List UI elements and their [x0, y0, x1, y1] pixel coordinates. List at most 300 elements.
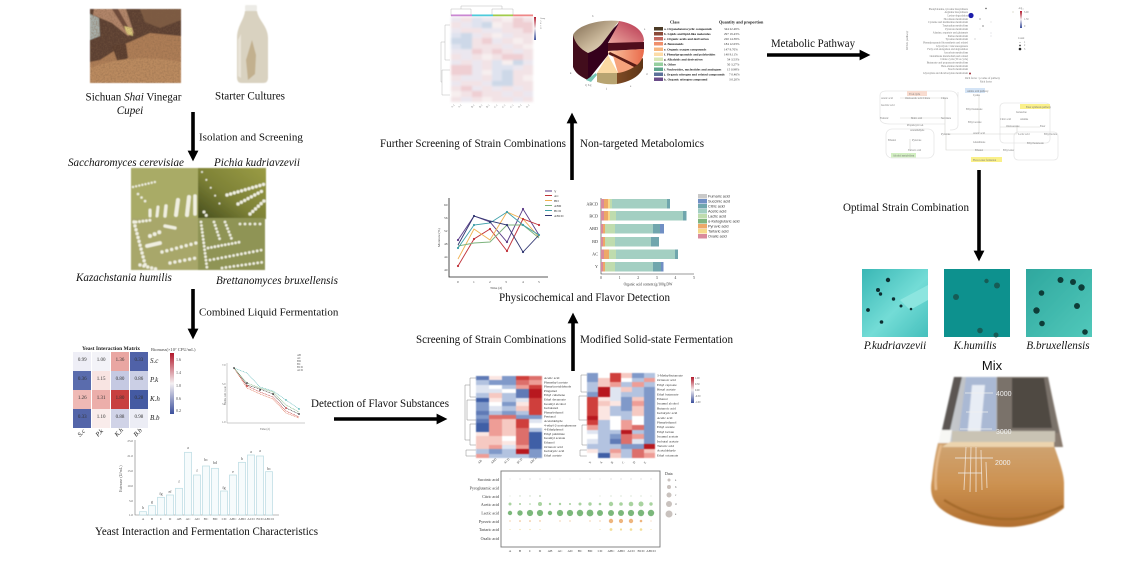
heatmap dendrograms and labels: organic compounds: Acetic acid	[657, 416, 673, 420]
chart: organic acid bubble matrix: a	[675, 479, 677, 482]
legend: metabolite classes and proportions: 297 19.43%	[724, 32, 740, 36]
chart: KEGG enrichment bubble plot: Glycolysis / Gluconeogenesis	[936, 45, 968, 48]
chart: organic acid bubble matrix: ACD	[627, 549, 635, 553]
chart: yeast interaction matrix labels and colourbar: S.c	[150, 357, 159, 365]
pie: orange sector	[608, 49, 644, 65]
diagram: metabolic pathway map: Glutathione	[973, 141, 986, 144]
chart: organic acid bubble matrix: C	[529, 549, 532, 553]
chart: enzyme activity bar chart	[118, 439, 279, 521]
legend: metabolite classes and proportions: 147 9.70%	[724, 48, 738, 52]
heatmap: flavor volatiles across strain combinations	[475, 375, 543, 459]
heatmap dendrograms and labels: organic compounds: Ethyl acetate	[657, 425, 675, 429]
diagram: metabolic pathway map: TCA cycle	[909, 93, 921, 96]
chart: enzyme activity bar chart: A	[142, 517, 145, 521]
heatmap dendrograms and labels: organic compounds: Ethanol	[657, 397, 668, 401]
chart: organic acid bubble matrix: ABC	[608, 549, 615, 553]
chart: organic acid bubble matrix: Tartaric acid	[479, 527, 499, 532]
chart: organic acid bubble matrix: BD	[588, 549, 593, 553]
chart: moisture line chart: 1	[473, 280, 475, 284]
chart: organic acid bubble matrix: BCD	[638, 549, 645, 553]
heatmap dendrograms and labels: organic compounds: Hexyl acetate	[657, 388, 676, 392]
chart: KEGG enrichment bubble plot	[905, 7, 1029, 84]
heatmap: organic compounds across strains	[586, 372, 656, 459]
chart: organic acid stacked bars: 1	[619, 276, 621, 280]
chart: yeast interaction matrix labels and colourbar: 1.4	[176, 370, 181, 375]
chart: organic acid bubble matrix: CD	[598, 549, 603, 553]
chart: moisture line chart: ABCD	[554, 214, 564, 218]
label: Screening of Strain Combinations: Screening of Strain Combinations	[416, 334, 566, 346]
chart: enzyme activity bar chart: ABCD	[264, 517, 274, 521]
chart: organic acid stacked bars: 4	[675, 276, 677, 280]
label: Combined Liquid Fermentation: Combined Liquid Fermentation	[199, 306, 339, 318]
heatmap dendrograms and labels: organic compounds: Ethyl lactate	[657, 430, 675, 434]
heatmap dendrograms and labels: organic compounds: 0.00	[695, 389, 700, 392]
chart: enzyme activity bar chart: BC	[204, 517, 209, 521]
chart: moisture line chart: 40	[444, 268, 448, 272]
chart: organic acid stacked bars: 5	[693, 276, 695, 280]
chart: KEGG enrichment bubble plot: Rich factor / p-value of pathway	[965, 77, 1001, 80]
legend: metabolite classes and proportions	[654, 20, 764, 82]
legend: metabolite classes and proportions: 140 9.11%	[724, 52, 738, 56]
chart: enzyme activity bar chart: a	[187, 445, 189, 450]
chart: KEGG enrichment bubble plot: Count	[1018, 37, 1025, 40]
arrow: optimal strain combination	[977, 170, 981, 256]
photo: Sichuan Shai vinegar cupei	[90, 9, 181, 83]
label: Brettanomyces bruxellensis: Brettanomyces bruxellensis	[216, 275, 338, 287]
legend: metabolite classes and proportions: 184 12.03%	[724, 42, 740, 46]
heatmap dendrograms and labels: organic compounds: D	[632, 460, 637, 465]
heatmap: yeast interaction matrix cells: 0.80	[116, 377, 124, 382]
label: Kazachstania humilis: Kazachstania humilis	[75, 272, 172, 284]
photo: four yeast colony plates	[131, 168, 266, 270]
chart: viable cell count line chart	[222, 354, 305, 431]
heatmap dendrograms and labels: flavor volatiles: Ethyl cubebene	[544, 393, 565, 397]
chart: organic acid stacked bars: 3	[656, 276, 658, 280]
chart: organic acid bubble matrix: Acetic acid	[481, 502, 499, 507]
diagram: metabolic pathway map: Lysine	[973, 94, 981, 97]
label: P.kudriavzevii: P.kudriavzevii	[863, 340, 926, 352]
arrow: isolation and screening	[191, 112, 195, 156]
legend: metabolite classes and proportions: d. Benzenoids	[664, 42, 684, 46]
chart: KEGG enrichment bubble plot: Citrate cycle (TCA cycle)	[940, 58, 968, 61]
diagram: metabolic pathway map: Ethanol	[975, 149, 983, 152]
chart: enzyme activity bar chart: AB	[177, 517, 182, 521]
heatmap: yeast interaction matrix cells: 1.15	[97, 377, 105, 382]
heatmap dendrograms and labels: organic compounds: Isobutyl acetate	[657, 439, 679, 443]
heatmap dendrograms and labels: organic compounds: Butanoic acid	[657, 406, 676, 410]
label: K.humilis: K.humilis	[953, 340, 996, 352]
label: Mix: Mix	[982, 358, 1003, 373]
label: Yeast Interaction and Fermentation Characteristics: Yeast Interaction and Fermentation Characteristics	[95, 526, 318, 538]
legend: metabolite classes and proportions: k. Organic nitrogen compound	[664, 78, 708, 82]
diagram: metabolic pathway map: Oxaloacetic acid Citrate	[905, 97, 931, 100]
diagram: metabolic pathway map: Acetic acid	[973, 132, 985, 135]
chart: organic acid bubble matrix: Pyruvic acid	[479, 519, 499, 524]
chart: organic acid bubble matrix: AC	[558, 549, 563, 553]
chart: yeast interaction matrix labels and colourbar: K.h	[113, 427, 125, 439]
heatmap dendrograms and labels: organic compounds: A	[599, 460, 604, 465]
metabolomics heatmap annotations: C-3	[510, 103, 515, 109]
chart: yeast interaction matrix labels and colourbar: P.k	[94, 428, 105, 439]
chart: enzyme activity bar chart: ABD	[238, 517, 246, 521]
chart: organic acid bubble matrix: D	[539, 549, 542, 553]
heatmap: yeast interaction matrix cells: 0.33	[134, 358, 143, 363]
chart: viable cell count line chart: BCD	[297, 366, 303, 369]
heatmap dendrograms and labels: flavor volatiles: AB	[477, 459, 483, 465]
label: Metabolic Pathway: Metabolic Pathway	[771, 38, 855, 50]
chart: organic acid bubble matrix: d	[675, 503, 677, 506]
heatmap: yeast interaction matrix cells: 0.28	[134, 396, 143, 401]
chart: moisture line chart: 48	[444, 242, 448, 246]
heatmap dendrograms and labels: flavor volatiles: Phenylacetaldehyde	[544, 385, 572, 389]
chart: organic acid bubble matrix: Data	[665, 471, 673, 476]
heatmap dendrograms and labels: organic compounds: 0.50	[695, 383, 700, 386]
chart: moisture line chart: 5	[538, 280, 540, 284]
chart: moisture line chart: 4	[522, 280, 524, 284]
chart: exploded 3D pie of metabolite classes	[570, 15, 648, 91]
pie: light cream sector	[597, 55, 618, 73]
arrow: combined liquid fermentation	[191, 289, 195, 334]
chart: organic acid bubble matrix: b	[675, 486, 677, 489]
chart: KEGG enrichment bubble plot: KEGG pathway	[905, 30, 909, 50]
chart: enzyme activity bar chart: e	[232, 469, 234, 474]
metabolomics heatmap annotations: A	[540, 20, 542, 22]
arrow: non-targeted metabolomics	[570, 118, 574, 180]
heatmap dendrograms and labels: flavor volatiles: Acetic acid	[544, 376, 560, 380]
chart: enzyme activity bar chart: bd	[213, 460, 217, 465]
heatmap dendrograms and labels: flavor volatiles: 4-Ethylphenol	[544, 428, 563, 432]
chart: enzyme activity bar chart: a	[259, 448, 261, 453]
chart: yeast interaction matrix labels and colourbar: B.b	[132, 427, 144, 438]
legend: metabolite classes and proportions: 7 0.46%	[729, 72, 740, 76]
chart: organic acid bubble matrix: c	[675, 494, 677, 497]
chart: organic acid stacked bars: Oxalic acid	[708, 234, 727, 238]
legend: metabolite classes and proportions: f. Phenylpropanoids and polyketides	[664, 52, 716, 56]
chart: organic acid bubble matrix: ABCD	[646, 549, 656, 553]
chart: KEGG enrichment bubble plot: 1.50	[1024, 18, 1029, 21]
heatmap dendrograms and labels: organic compounds: Octanoic acid	[657, 378, 676, 382]
chart: enzyme activity bar chart: D	[169, 517, 172, 521]
metabolomics heatmap annotations: D-1	[518, 103, 523, 109]
chart: organic acid stacked bars: BD	[592, 239, 598, 244]
pie: maroon stripe sector	[608, 52, 637, 67]
diagram: metabolic pathway map: Isocitric acid	[881, 104, 895, 107]
pie: red top sector	[608, 21, 644, 44]
photo: K. humilis colonies	[944, 269, 1010, 338]
photo: B. bruxellensis colonies	[1026, 269, 1092, 337]
heatmap dendrograms and labels: organic compounds: C	[621, 460, 625, 465]
chart: organic acid stacked bars: Acetic acid	[708, 210, 726, 214]
chart: moisture line chart: AC	[554, 194, 559, 198]
pie: dark wall of lifted slice	[573, 35, 588, 80]
chart: viable cell count line chart: AC	[297, 357, 301, 360]
chart: moisture line chart: Time (d)	[490, 286, 503, 290]
chart: organic acid bubble matrix: Oxalic acid	[481, 536, 499, 541]
heatmap dendrograms and labels: flavor volatiles: Ethyl decanoate	[544, 398, 566, 402]
metabolomics heatmap annotations: D	[540, 28, 542, 30]
chart: organic acid stacked bars: Lactic acid	[708, 214, 726, 218]
heatmap: yeast interaction matrix cells: 1.80	[116, 396, 124, 401]
heatmap dendrograms and labels: flavor volatiles: Isoamyl alcohol	[544, 402, 566, 406]
chart: moisture line chart: BD	[554, 199, 559, 203]
chart: yeast interaction matrix labels and colourbar: S.c	[76, 428, 87, 438]
legend: metabolite classes and proportions: b. Lipids and lipid-like molecules	[664, 32, 711, 36]
chart: yeast interaction matrix labels and colourbar: Biomass(×10⁷ CFU/mL)	[151, 347, 196, 352]
legend: metabolite classes and proportions: a. Organoheterocyclic compounds	[664, 27, 713, 31]
heatmap dendrograms and labels: flavor volatiles: Octanoic acid	[544, 445, 563, 449]
legend: metabolite classes and proportions: e. Organic oxygen compounds	[664, 48, 707, 52]
chart: organic acid bubble matrix: ABD	[617, 549, 625, 553]
photo: flask of mixed fermentation culture: 2000	[995, 460, 1011, 467]
heatmap dendrograms and labels: organic compounds: E	[643, 460, 647, 465]
chart: moisture line chart: 56	[444, 216, 448, 220]
metabolomics heatmap annotations: C-1	[494, 103, 499, 109]
chart: organic acid bubble matrix: Citric acid	[482, 494, 499, 499]
heatmap dendrograms and labels: flavor volatiles: Isobutanol	[544, 406, 558, 410]
diagram: metabolic pathway map: Acetaldehyde	[910, 129, 925, 132]
heatmap dendrograms and labels: organic compounds: Acetaldehyde	[657, 449, 676, 453]
diagram: metabolic pathway map: Ethyl ester	[1003, 149, 1014, 152]
diagram: metabolic pathway map: Alcohol metabolism	[893, 154, 914, 158]
chart: enzyme activity bar chart: h	[142, 505, 144, 510]
heatmap: yeast interaction matrix cells: 1.36	[116, 358, 124, 363]
diagram: metabolic pathway map: Amino acid pathway	[967, 90, 989, 93]
arrow: detection of flavor substances	[334, 417, 442, 421]
chart: organic acid stacked bars: Tartaric acid	[708, 230, 728, 234]
pie: sector letters: i j h g	[585, 84, 592, 87]
legend: metabolite classes and proportions: 15 0.98%	[727, 68, 740, 72]
heatmap dendrograms and labels: flavor volatiles: ABD	[490, 457, 498, 465]
chart: organic acid bubble matrix: A	[509, 549, 512, 553]
chart: organic acid bubble matrix: BC	[578, 549, 583, 553]
diagram: metabolic pathway map: Ester synthesis pathway	[1026, 106, 1052, 109]
legend: metabolite classes and proportions: g. Alkaloids and derivatives	[664, 58, 704, 62]
chart: enzyme activity bar chart: ACD	[247, 517, 255, 521]
label: Pichia kudriavzevii: Pichia kudriavzevii	[213, 157, 300, 169]
diagram: metabolic pathway map: Citric acid	[1000, 118, 1012, 121]
chart: enzyme activity bar chart: f	[178, 479, 180, 484]
heatmap dendrograms and labels: flavor volatiles: Isoamyl acetate	[544, 436, 566, 440]
heatmap dendrograms and labels: organic compounds: Tartaric acid	[657, 444, 674, 448]
diagram: metabolic pathway map: Propanoyl-CoA	[907, 124, 924, 127]
chart: enzyme activity bar chart: 25.0	[127, 439, 133, 443]
chart: organic acid stacked bars: ABD	[589, 226, 598, 231]
chart: enzyme activity bar chart: AC	[186, 517, 191, 521]
pie: dark inner wall of lifted slice	[588, 23, 619, 80]
heatmap: yeast interaction matrix cells: 0.86	[134, 377, 143, 382]
chart: enzyme activity bar chart: CD	[222, 517, 227, 521]
heatmap dendrograms and labels: organic compounds: Phenylethanol	[657, 420, 676, 424]
diagram: metabolic pathway map: Tartaric acid	[908, 149, 922, 152]
legend: metabolite classes and proportions: Quantity and proportion	[719, 20, 764, 24]
chart: organic acid bubble matrix: B	[519, 549, 522, 553]
chart: organic acid stacked bars: α-Ketoglutaric acid	[708, 220, 740, 224]
chart: moisture line chart: 3	[505, 280, 507, 284]
chart: KEGG enrichment bubble plot: Phenylalanine, tyrosine biosynthesis	[929, 8, 968, 11]
chart: moisture line chart: 2	[489, 280, 491, 284]
chart: moisture line chart: BCD	[554, 209, 562, 213]
chart: KEGG enrichment bubble plot: Tryptophan metabolism	[942, 24, 969, 28]
chart: yeast interaction matrix labels and colourbar: 0.2	[176, 408, 181, 413]
pie: sector letters: d	[646, 73, 648, 76]
heatmap dendrograms and labels: flavor volatiles: ABCD	[529, 455, 538, 465]
diagram: metabolic pathway map: Fumaric	[880, 117, 889, 120]
chart: moisture line chart: 60	[444, 203, 448, 207]
label: Further Screening of Strain Combinations: Further Screening of Strain Combinations	[380, 138, 567, 150]
photo: flask of mixed fermentation culture	[931, 377, 1064, 527]
diagram: metabolic pathway map: Acetic acid	[881, 97, 893, 100]
chart: organic acid stacked bars: Pyruvic acid	[708, 224, 728, 228]
legend: metabolite classes and proportions: 3 0.20%	[729, 78, 740, 82]
chart: KEGG enrichment bubble plot: 1	[1024, 41, 1026, 44]
diagram: metabolic pathway map: Flavor ester formation	[973, 159, 997, 162]
legend: metabolite classes and proportions: 50 3.27%	[727, 62, 740, 66]
chart: enzyme activity bar chart: C	[160, 517, 163, 521]
metabolomics heatmap annotations	[441, 6, 545, 109]
chart: organic acid stacked bars: Fumaric acid	[708, 194, 730, 198]
pie: sector letters: e	[630, 85, 632, 88]
chart: KEGG enrichment bubble plot: Phenylpropanoid biosynthesis and related	[923, 42, 969, 44]
label: Non-targeted Metabolomics: Non-targeted Metabolomics	[580, 138, 704, 150]
label: Sichuan Shai Vinegar Cupei	[86, 92, 182, 117]
chart: yeast interaction matrix labels and colourbar: B.b	[150, 414, 160, 422]
chart: viable cell count line chart: Viable cell count	[224, 386, 227, 405]
metabolomics heatmap annotations: A-1	[451, 103, 456, 109]
chart: KEGG enrichment bubble plot: -log₁₀	[1018, 7, 1024, 10]
chart: organic acid bubble matrix: AB	[548, 549, 553, 553]
diagram: metabolic pathway map: Ethyl lactate	[1044, 133, 1058, 136]
chart: moisture line chart: 0	[457, 280, 459, 284]
diagram: metabolic pathway map: Alanine	[1020, 118, 1029, 121]
chart: moisture line chart: ABD	[554, 204, 562, 208]
diagram: metabolic pathway map: Ethyl butanoate	[966, 108, 983, 111]
heatmap dendrograms and labels: organic compounds: -1.00	[695, 401, 701, 404]
diagram: metabolic pathway map: Pyruvate	[912, 139, 922, 142]
chart: moisture line chart: Y	[554, 190, 557, 194]
chart: enzyme activity bar chart: f	[196, 468, 198, 473]
chart: organic acid stacked bars: AC	[592, 252, 598, 256]
heatmap dendrograms and labels: organic compounds: Ethyl caproate	[657, 383, 677, 387]
chart: enzyme activity bar chart: ABC	[229, 517, 237, 521]
diagram: metabolic pathway map: Lactic acid	[1018, 133, 1030, 136]
label: Starter Cultures: Starter Cultures	[215, 90, 285, 102]
label: Sichuan Shai Vinegar Cupei: Sichuan Shai Vinegar	[86, 92, 182, 104]
chart: enzyme activity bar chart: Esterase (U/mL)	[118, 465, 123, 492]
metabolomics heatmap annotations: C-2	[502, 103, 507, 109]
heatmap: yeast interaction matrix cells	[73, 352, 148, 428]
chart: enzyme activity bar chart: 10.0	[127, 484, 133, 488]
chart: organic acid stacked bars: Organic acid content (g/100g DW	[624, 282, 673, 286]
arrow: modified solid-state fermentation	[571, 318, 575, 371]
chart: viable cell count line chart: 7.0	[222, 364, 226, 367]
chart: enzyme activity bar chart: fg	[159, 491, 163, 496]
diagram: metabolic pathway map	[880, 88, 1058, 162]
chart: organic acid stacked bars: Citric acid	[708, 204, 725, 208]
legend: metabolite classes and proportions: i. Nucleosides, nucleotides and analogues	[664, 68, 722, 72]
chart: viable cell count line chart: BD	[297, 360, 301, 363]
chart: enzyme activity bar chart: bc	[204, 457, 208, 462]
chart: enzyme activity bar chart: 5.0	[129, 499, 133, 503]
chart: viable cell count line chart: Time (d)	[260, 428, 270, 431]
heatmap: yeast interaction matrix cells: 1.26	[78, 396, 87, 401]
chart: KEGG enrichment bubble plot: 3.00	[1024, 11, 1029, 14]
heatmap: yeast interaction matrix cells: 0.33	[78, 415, 87, 420]
heatmap dendrograms and labels: flavor volatiles: Isobutyric acid	[544, 449, 565, 453]
chart: viable cell count line chart: BC	[297, 363, 301, 366]
heatmap dendrograms and labels: flavor volatiles: Pinguinol	[544, 389, 557, 393]
chart: enzyme activity bar chart: B	[151, 517, 154, 521]
metabolomics heatmap annotations: Group	[540, 18, 545, 20]
chart: enzyme activity bar chart: a	[250, 449, 252, 454]
chart: KEGG enrichment bubble plot: 2	[1024, 44, 1026, 47]
chart: organic acid stacked bars	[586, 194, 740, 286]
heatmap dendrograms and labels: organic compounds: Isobutyric acid	[657, 411, 678, 415]
heatmap dendrograms and labels: flavor volatiles: Ethyl palmitate	[544, 432, 565, 436]
chart: KEGG enrichment bubble plot: Butanoate and propanoate metabolism	[927, 62, 969, 64]
chart: enzyme activity bar chart: 15.0	[127, 469, 133, 473]
heatmap dendrograms and labels: flavor volatiles: Acetaldehyde	[544, 419, 563, 423]
label: Saccharomyces cerevisiae: Saccharomyces cerevisiae	[68, 157, 184, 169]
chart: KEGG enrichment bubble plot: Purine metabolism	[948, 35, 969, 38]
chart: organic acid bubble matrix: e	[675, 513, 677, 516]
chart: moisture line chart: 44	[444, 255, 448, 259]
diagram: metabolic pathway map: Pyruvate	[941, 133, 951, 136]
pie: tan lifted slice	[573, 21, 619, 53]
chart: viable cell count line chart: 1.0	[222, 421, 226, 424]
heatmap dendrograms and labels: flavor volatiles: Phenylethanol	[544, 410, 563, 414]
heatmap dendrograms and labels: organic compounds: Isoamyl acetate	[657, 435, 679, 439]
heatmap dendrograms and labels: organic compounds: Ethyl octanoate	[657, 453, 679, 457]
pie: sector letters: b	[592, 15, 594, 18]
chart: organic acid bubble matrix: Lactic acid	[481, 510, 499, 516]
chart: organic acid stacked bars: Y	[595, 264, 598, 269]
chart: yeast interaction matrix labels and colourbar	[76, 346, 196, 439]
diagram: metabolic pathway map: Malic acid	[911, 117, 923, 120]
label: Detection of Flavor Substances: Detection of Flavor Substances	[311, 398, 449, 410]
photo: P. kudriavzevii colonies	[862, 269, 928, 337]
heatmap dendrograms and labels: flavor volatiles: Phenethyl acetate	[544, 380, 568, 384]
legend: metabolite classes and proportions: h. Other	[664, 62, 676, 66]
legend: metabolite classes and proportions: Class	[670, 20, 680, 24]
chart: yeast interaction matrix labels and colourbar: P.k	[149, 376, 159, 384]
heatmap dendrograms and labels: organic compounds: Isoamyl alcohol	[657, 402, 679, 406]
chart: yeast interaction matrix labels and colourbar: Yeast Interaction Matrix	[82, 346, 140, 352]
chart: KEGG enrichment bubble plot: Alanine, aspartate and glutamate	[933, 32, 969, 34]
chart: enzyme activity bar chart: g	[151, 499, 153, 504]
chart: enzyme activity bar chart: 1.0	[129, 513, 133, 517]
heatmap: yeast interaction matrix cells: 1.00	[97, 358, 105, 363]
label: Optimal Strain Combination: Optimal Strain Combination	[843, 202, 969, 214]
chart: KEGG enrichment bubble plot: 3	[1024, 48, 1026, 51]
pie: side wall brown	[617, 58, 643, 84]
chart: organic acid stacked bars: Succinic acid	[708, 200, 730, 204]
chart: KEGG enrichment bubble plot: Cysteine and methionine metabolism	[928, 21, 969, 24]
heatmap dendrograms and labels: organic compounds: 3-Methylbutanoate	[657, 374, 683, 378]
metabolomics heatmap annotations: A-2	[458, 103, 463, 109]
chart: enzyme activity bar chart: ef	[168, 489, 172, 494]
heatmap: yeast interaction matrix cells: 1.10	[97, 415, 105, 420]
heatmap: yeast interaction matrix cells: 0.36	[78, 377, 87, 382]
pie: sector letters: a	[644, 28, 646, 31]
chart: KEGG enrichment bubble plot: Glutathione metabolism and related	[930, 55, 969, 58]
legend: metabolite classes and proportions: j. Organic nitrogen and related compounds	[663, 72, 725, 76]
pie: teal minor sectors	[586, 73, 597, 82]
chart: organic acid stacked bars: 2	[637, 276, 639, 280]
heatmap dendrograms and labels: flavor volatiles: Pentanal	[544, 415, 556, 419]
legend: metabolite classes and proportions: c. Organic acids and derivatives	[664, 37, 710, 41]
diagram: metabolic pathway map: Succinate	[941, 117, 952, 120]
heatmap dendrograms and labels: flavor volatiles: ACD	[503, 457, 511, 465]
